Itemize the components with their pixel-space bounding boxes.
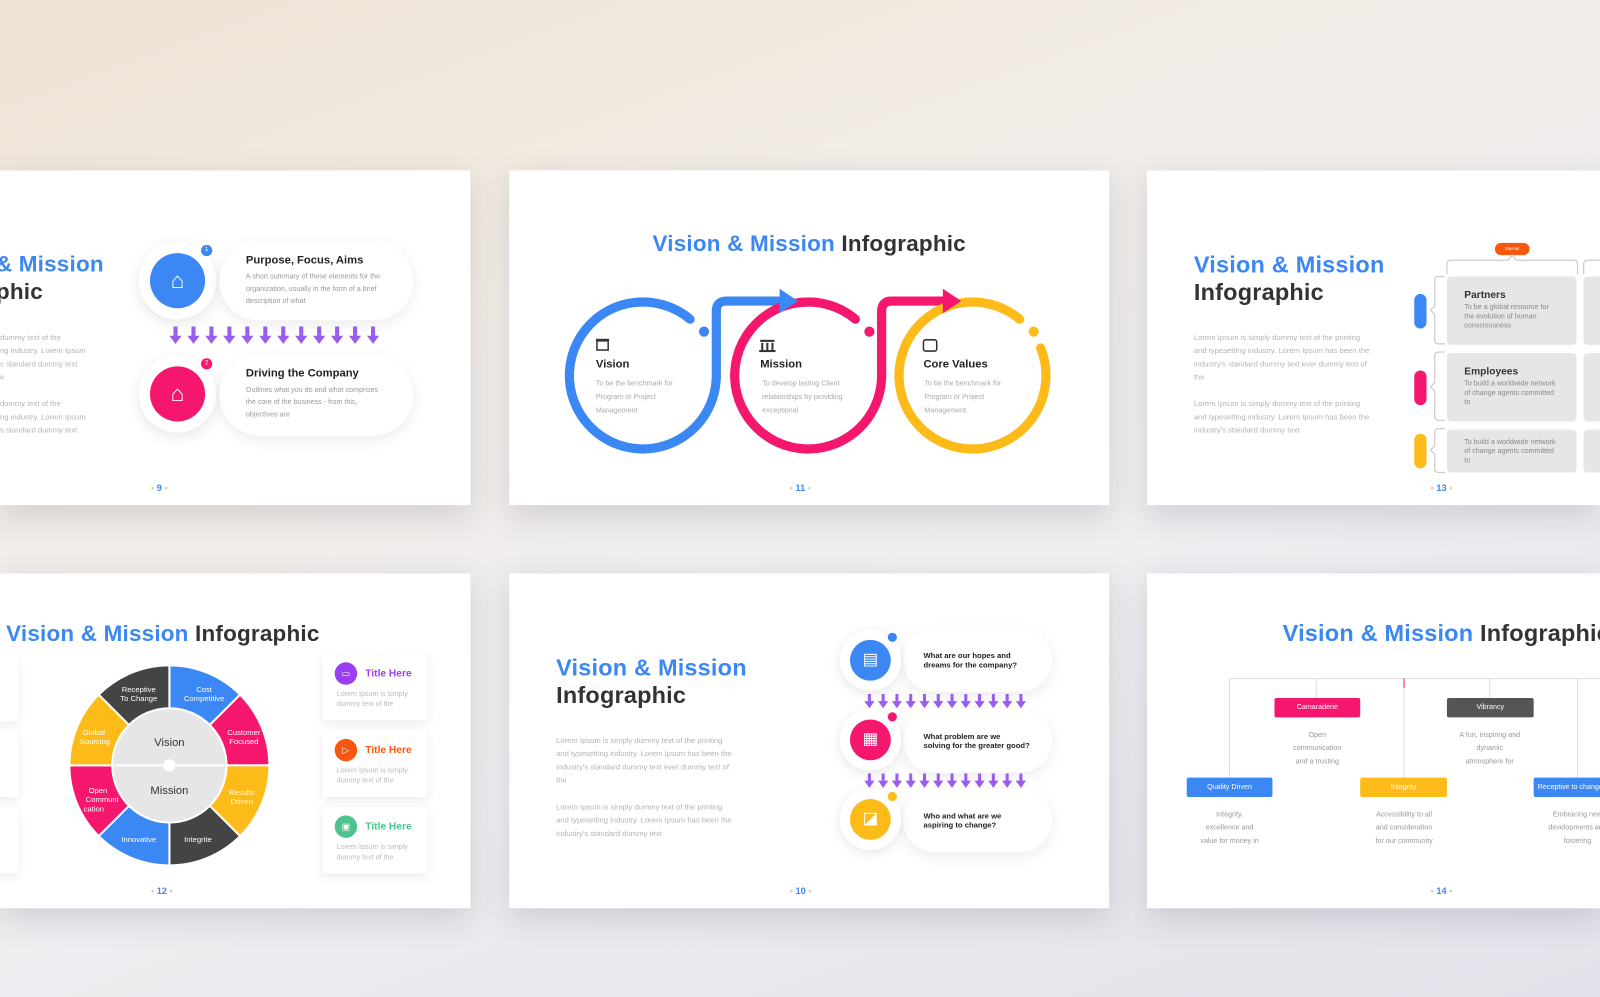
callout: q3: aspiring to change? (923, 820, 996, 830)
chart: three circles: Management (924, 406, 966, 414)
arrows row 1 (864, 694, 1026, 708)
title (1194, 251, 1384, 305)
callout: driving: Driving the Company (246, 367, 359, 380)
card: title green (322, 807, 428, 874)
chart: three circles: exceptional (762, 406, 799, 414)
chart: three circles: Management (596, 406, 638, 414)
callout: q3 (903, 789, 1052, 852)
panel: slide 14 org chart: Integrity, (1216, 811, 1243, 818)
chart: donut: Communi (86, 795, 119, 804)
chart: donut: Vision (154, 737, 185, 749)
text block: s standard dummy text (0, 359, 77, 368)
box: quality driven: Quality Driven (1207, 784, 1252, 791)
icon: pink home: ⌂ (171, 381, 184, 406)
title: Infographic (1194, 279, 1324, 305)
box: partners: Partners (1464, 290, 1506, 301)
icon: q2 pink: ▦ (863, 731, 878, 748)
box: partners (1447, 277, 1577, 345)
icon: q1 blue (840, 630, 901, 691)
card: title orange: Lorem Ipsum is simply dummy text of the (337, 767, 408, 785)
chart: donut: Driven (231, 797, 253, 806)
icon: blue home (139, 242, 216, 319)
label: internal (1495, 243, 1530, 255)
icon: q1 blue: ▤ (863, 651, 878, 668)
boxes: second column (1584, 276, 1600, 472)
card: title orange (322, 731, 428, 797)
box: employees: Employees (1464, 366, 1518, 378)
card: title green: Title Here (365, 821, 412, 832)
panel: slide 12 donut (0, 574, 470, 908)
icon: pink home: 2 (205, 360, 208, 366)
panel: slide 14 org chart: Accessibility to all (1376, 811, 1432, 818)
chart: three circles: Program or Project (596, 393, 656, 401)
callout: q2 (903, 709, 1052, 773)
panel: slide 14 org chart: Open (1309, 732, 1326, 739)
chart: three circles: Vision (596, 358, 630, 370)
callout: driving (219, 354, 413, 436)
arrows row 2 (864, 774, 1026, 788)
callout: q1: What are our hopes and (923, 651, 1011, 660)
callout: driving: Outlines what you do and what comprises the core of the business - from this, objectives are (246, 387, 378, 418)
callout: purpose (219, 241, 413, 320)
text block: Lorem Ipsum is simply dummy text of the printing and typesetting industry. Lorem Ipsum has been the industry's standard dummy text ever dummy text of the (1194, 333, 1369, 382)
callout: q1 (903, 629, 1052, 692)
label: internal: Internal (1505, 246, 1519, 251)
panel: slide 14 org chart: excellence and (1206, 825, 1253, 832)
icon: blue home: 1 (205, 247, 208, 253)
chart: donut: Focused (229, 737, 259, 746)
chart: donut: Competitive (184, 694, 224, 703)
chart: donut: Receptive (122, 685, 156, 694)
text block: ng industry. Lorem Ipsum (0, 346, 86, 355)
text block: dummy text of the (0, 399, 61, 408)
tag: values (1414, 434, 1427, 468)
text block (0, 333, 86, 435)
chart: donut: Results (229, 788, 255, 797)
page number: 13 (1436, 483, 1447, 493)
card: title purple: ▭ (342, 668, 350, 679)
connector lines (1229, 678, 1600, 778)
card: title purple: Lorem Ipsum is simply dummy text of the (337, 691, 408, 708)
chart: donut: Integrite (184, 835, 212, 844)
panel: slide 10 questions (509, 574, 1109, 908)
box: integrity: Integrity (1391, 784, 1416, 791)
tag: vision (1414, 294, 1427, 329)
tag: mission (1414, 370, 1427, 405)
card: title orange: Title Here (365, 744, 412, 756)
icon: pink home (139, 355, 216, 433)
title: Vision & Mission Infographic (6, 620, 320, 646)
icon: q2 pink (840, 709, 901, 770)
card: title green: ▣ (342, 822, 350, 832)
title: Vision & Mission (1194, 251, 1384, 278)
heading (0, 251, 104, 304)
chart: donut: Cost (196, 685, 213, 694)
text block: ng industry. Lorem Ipsum (0, 412, 86, 421)
box: partners: To be a global resource for the evolution of human consciousness (1464, 304, 1549, 330)
box: employees: To build a worldwide network of change agents committed to (1464, 381, 1556, 406)
page number: 12 (157, 886, 167, 896)
text block: e (0, 372, 4, 382)
title (556, 654, 747, 708)
partial cards left (0, 666, 19, 878)
callout: q3: Who and what are we (923, 811, 1001, 820)
text block: Lorem Ipsum is simply dummy text of the printing and typesetting industry. Lorem Ipsum has been the industry's standard dummy text (1194, 399, 1369, 435)
icon: q3 yellow: ◪ (863, 810, 878, 828)
page number: 11 (796, 483, 805, 493)
callout: q1: dreams for the company? (923, 660, 1017, 669)
page number: 9 (157, 483, 162, 493)
card: title purple (322, 654, 428, 720)
arrows: purple row (170, 326, 380, 344)
card: title orange: ▷ (342, 745, 349, 755)
card: title purple: Title Here (365, 668, 412, 679)
chart: donut: Global (83, 728, 105, 737)
box: camaraderie (1274, 698, 1360, 717)
box: row3 (1447, 430, 1577, 472)
panel: slide 14 org chart: atmosphere for (1466, 758, 1514, 765)
text block: Lorem Ipsum is simply dummy text of the printing and typesetting industry. Lorem Ipsum has been the industry's standard dummy text ever dummy text of the (556, 736, 732, 785)
chart: three circles: To be the benchmark for (924, 380, 1002, 388)
box: integrity (1360, 778, 1447, 797)
text block (1194, 333, 1369, 435)
panel: slide 14 org chart (1147, 574, 1600, 908)
chart: donut: Sourcing (80, 737, 110, 746)
text block: s standard dummy text (0, 426, 77, 435)
panel: slide 14 org chart: and a trusting (1296, 758, 1339, 765)
panel: slide 14 org chart: for our community (1375, 838, 1433, 845)
callout: purpose: Purpose, Focus, Aims (246, 254, 363, 266)
panel: slide 14 org chart: value for money in (1200, 838, 1259, 845)
box: vibrancy: Vibrancy (1476, 704, 1504, 711)
chart: donut: cation (84, 804, 104, 813)
chart: donut (70, 666, 268, 864)
page number: 10 (796, 886, 806, 896)
text block (556, 736, 732, 838)
chart: donut: Innovative (121, 835, 156, 844)
callout: purpose: A short summary of these elements for the organization, usually in the form of a brief description of what (246, 273, 380, 305)
panel: slide 14 org chart: fostering (1564, 838, 1591, 845)
chart: three circles: Core Values (923, 358, 988, 370)
callout: q2: What problem are we (923, 732, 1000, 741)
chart: three circles: Program or Project (924, 393, 984, 401)
text block: Lorem Ipsum is simply dummy text of the printing and typesetting industry. Lorem Ipsum has been the industry's standard dummy text (556, 802, 732, 838)
title: Vision & Mission Infographic (652, 231, 966, 256)
panel: slide 13 table (1147, 170, 1600, 505)
box: employees (1447, 353, 1577, 421)
panel: slide 14 org chart: dynamic (1476, 745, 1503, 752)
panel: slide 14 org chart: A fun, inspiring and (1459, 732, 1520, 739)
box: camaraderie: Camaraderie (1297, 704, 1338, 711)
icon: blue home: ⌂ (171, 267, 184, 293)
title: Vision & Mission (556, 654, 747, 681)
chart: three circles (564, 288, 1051, 454)
panel: slide 11 circles (509, 170, 1109, 505)
brackets (1430, 254, 1600, 474)
panel: slide 9 purpose driving (0, 170, 470, 505)
panel: slide 14 org chart: communication (1293, 745, 1341, 752)
text block: dummy text of the (0, 333, 61, 342)
icon: q3 yellow (840, 789, 901, 850)
box: quality driven (1187, 778, 1272, 797)
box: vibrancy (1447, 698, 1534, 717)
chart: donut: Customer (227, 728, 261, 737)
box: receptive (1534, 778, 1600, 797)
chart: donut: To Change (120, 694, 157, 703)
panel: slide 14 org chart: and consideration (1376, 825, 1432, 832)
chart: three circles: Mission (760, 358, 802, 370)
box: row3: To build a worldwide network of change agents committed to (1464, 439, 1556, 464)
chart: three circles: To be the benchmark for (596, 380, 673, 388)
callout: q2: solving for the greater good? (923, 741, 1030, 750)
chart: three circles: To develop lasting Client (762, 380, 839, 388)
chart: donut: Mission (150, 785, 188, 797)
title: Infographic (556, 682, 686, 708)
chart: donut: Open (89, 786, 107, 795)
card: title green: Lorem Ipsum is simply dummy text of the (337, 844, 408, 861)
chart: three circles: relationships by providing (762, 393, 843, 401)
page number: 14 (1436, 886, 1447, 896)
